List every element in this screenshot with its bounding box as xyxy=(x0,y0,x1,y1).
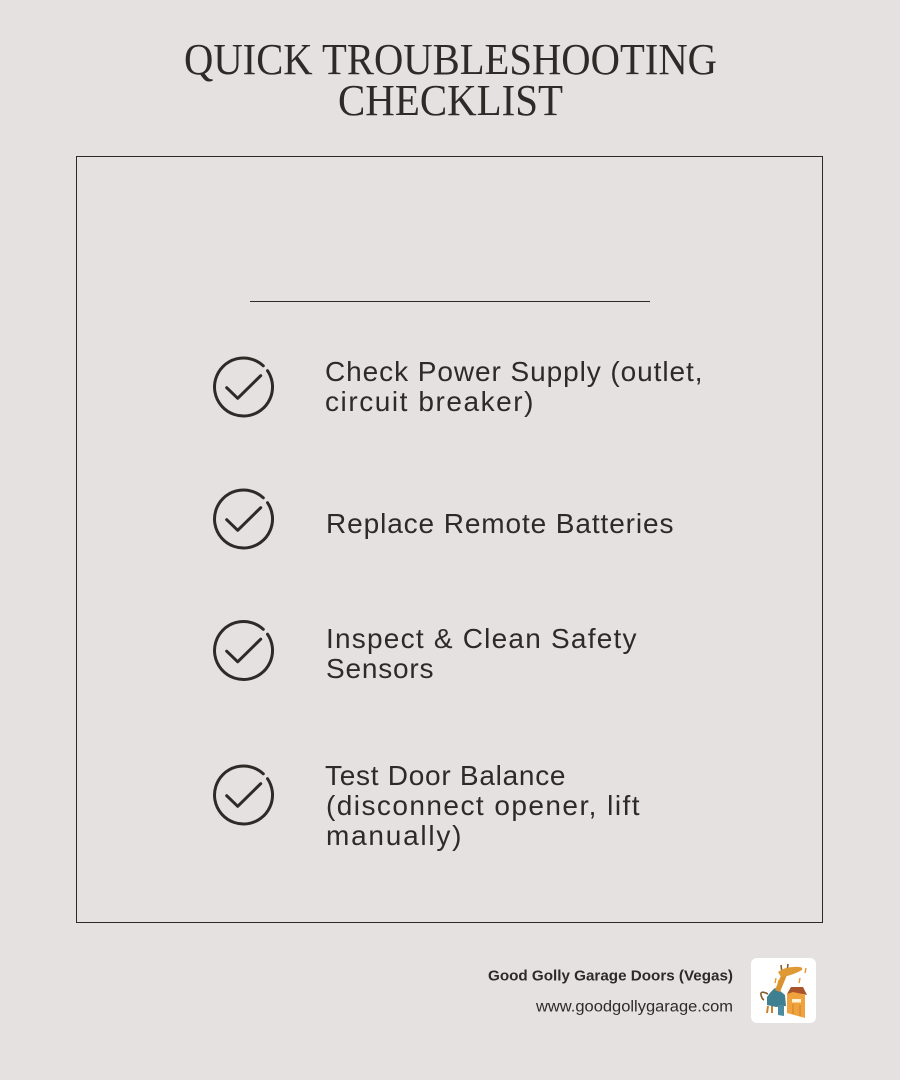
checklist item: door balance xyxy=(215,760,640,851)
text: power supply xyxy=(325,356,702,417)
checklist item: safety sensors xyxy=(215,622,636,684)
icon: check circle xyxy=(215,622,273,680)
text: door balance: Test Door Balance xyxy=(325,760,566,791)
icon: check circle xyxy=(215,358,273,416)
text: power supply: Check Power Supply (outlet, xyxy=(325,356,702,387)
text: power supply: circuit breaker) xyxy=(325,386,534,417)
footer company name: Good Golly Garage Doors (Vegas) xyxy=(488,968,733,984)
icon: check circle xyxy=(215,490,273,548)
checklist item: power supply xyxy=(215,356,702,417)
checklist item: remote batteries xyxy=(215,490,674,548)
title xyxy=(184,35,717,125)
text: door balance: manually) xyxy=(326,820,462,851)
title: QUICK TROUBLESHOOTING xyxy=(184,35,717,84)
logo: giraffe with garage xyxy=(751,958,816,1023)
text: safety sensors xyxy=(326,623,636,684)
panel: checklist frame xyxy=(76,156,822,922)
footer website: www.goodgollygarage.com xyxy=(535,998,733,1016)
title: CHECKLIST xyxy=(338,76,563,125)
text: safety sensors: Inspect & Clean Safety xyxy=(326,623,636,654)
text: remote batteries: Replace Remote Batteries xyxy=(326,508,674,539)
text: door balance xyxy=(325,760,640,851)
icon: check circle xyxy=(215,766,273,824)
text: safety sensors: Sensors xyxy=(326,653,434,684)
text: door balance: (disconnect opener, lift xyxy=(326,790,640,821)
